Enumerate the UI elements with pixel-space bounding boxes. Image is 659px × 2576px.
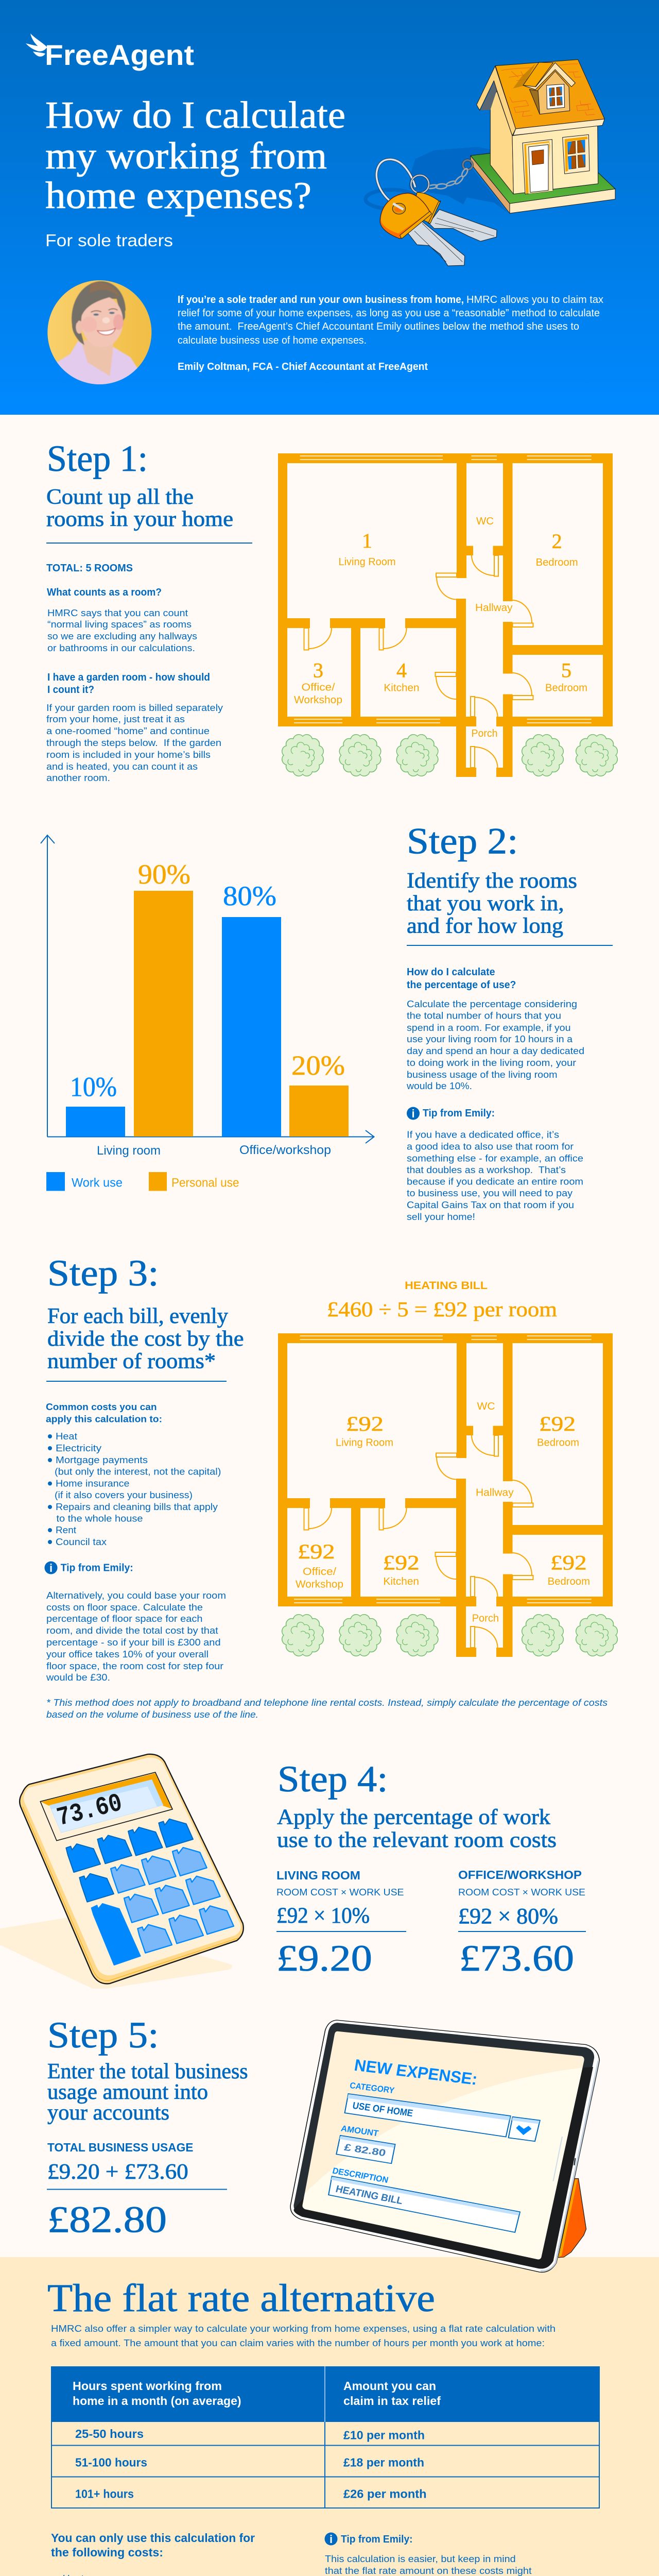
- intro text: HMRC also offer a simpler way to calculate your working from home expenses, using a flat rate calculation with: [51, 2323, 556, 2334]
- tip text: that the flat rate amount on these costs might: [325, 2565, 532, 2576]
- intro text: [178, 294, 603, 372]
- tip text: to business use, you will need to pay: [407, 1188, 573, 1198]
- total business usage: £9.20 + £73.60: [47, 2160, 188, 2184]
- intro text: a fixed amount. The amount that you can claim varies with the number of hours per month you work at home:: [51, 2337, 545, 2348]
- garden room answer: If your garden room is billed separately: [46, 702, 223, 713]
- subtitle: For sole traders: [45, 231, 173, 250]
- calculation: living room: LIVING ROOM: [276, 1869, 360, 1882]
- panel: flat rate alternative: [0, 2277, 659, 2576]
- total rooms: TOTAL: 5 ROOMS: [46, 563, 133, 574]
- icon: tip info: i: [330, 2533, 333, 2546]
- room cost labels: £92: [550, 1551, 587, 1574]
- tip text: Alternatively, you could base your room: [46, 1590, 226, 1601]
- eligible costs heading: [51, 2531, 255, 2559]
- subheading: divide the cost: [47, 1304, 244, 1374]
- room cost labels: Porch: [472, 1613, 499, 1624]
- room cost labels: £92: [346, 1412, 384, 1435]
- heating bill calculation: HEATING BILL: [405, 1280, 488, 1292]
- legend: [46, 1172, 239, 1191]
- footnote: based on the volume of business use of the line.: [46, 1709, 258, 1720]
- room labels: Porch: [472, 728, 497, 739]
- illustration: calculator: [0, 1754, 244, 1989]
- icon: tip info: [44, 1561, 58, 1574]
- garden room answer: another room.: [46, 772, 110, 783]
- calculator display value: 73.60: [54, 1789, 125, 1833]
- bar values: 80%: [223, 880, 276, 911]
- list of common costs: (but only the interest, not the capital): [55, 1466, 221, 1477]
- eligible costs heading: the following costs:: [51, 2546, 163, 2559]
- tip text: floor space, the room cost for step four: [46, 1660, 223, 1671]
- subheading: identify the rooms: [407, 869, 577, 938]
- room cost labels: Living Room: [336, 1437, 393, 1449]
- subheading: divide the cost: divide the cost by the: [47, 1327, 244, 1351]
- answer text: [47, 607, 197, 653]
- room cost labels: £92: [383, 1551, 420, 1574]
- room labels: 2: [552, 530, 562, 553]
- table header: home in a month (on average): [73, 2394, 241, 2408]
- tip text: your office takes 10% of your overall: [46, 1649, 209, 1659]
- table rows: [75, 2427, 427, 2501]
- tip text: If you have a dedicated office, it’s: [407, 1129, 559, 1140]
- subheading: identify the rooms: and for how long: [407, 914, 563, 938]
- footnote: * This method does not apply to broadband and telephone line rental costs. Instead, simply calculate the percentage of costs: [46, 1697, 608, 1708]
- tip text: [46, 1590, 226, 1683]
- bar values: 10%: [70, 1072, 117, 1103]
- list of common costs: Council tax: [56, 1536, 107, 1547]
- calculation: living room: ROOM COST × WORK USE: [276, 1887, 404, 1897]
- axis labels: [97, 1143, 331, 1158]
- tip text: a good idea to also use that room for: [407, 1141, 574, 1152]
- room labels: Hallway: [475, 602, 513, 614]
- subheading: enter the total: [47, 2060, 248, 2125]
- list of common costs: to the whole house: [57, 1513, 143, 1524]
- tip text: percentage - so if your bill is £300 and: [46, 1637, 221, 1648]
- form labels: NEW EXPENSE:: [353, 2056, 479, 2089]
- logo: FreeAgent: FreeAgent: [45, 39, 194, 71]
- tip text: room, and divide the total cost by that: [46, 1625, 218, 1636]
- question: what counts as a room: What counts as a room?: [47, 587, 162, 598]
- description field: [328, 2176, 520, 2232]
- table rows: 25-50 hours: [75, 2427, 144, 2441]
- panel: flat rate background: [0, 2257, 659, 2576]
- bar chart: work use vs personal use: [41, 835, 374, 1191]
- room labels: [294, 516, 587, 739]
- table rows: £10 per month: [343, 2429, 425, 2442]
- room cost labels: Office/: [303, 1566, 336, 1578]
- form labels: AMOUNT: [340, 2124, 379, 2138]
- amount field: [336, 2136, 395, 2163]
- subheading: apply the percentage: Apply the percentage of work: [277, 1806, 550, 1829]
- icon: tip info: [324, 2533, 338, 2546]
- title: How do I calculate: [45, 94, 345, 137]
- room labels: 5: [561, 658, 571, 682]
- question: percentage of use: [407, 967, 516, 991]
- photo: Emily Coltman: [47, 280, 151, 386]
- percentage explanation: to doing work in the living room, your: [407, 1057, 576, 1068]
- room cost labels: Bedroom: [548, 1576, 590, 1587]
- form labels: DESCRIPTION: [332, 2166, 389, 2185]
- form labels: HEATING BILL: [335, 2183, 404, 2207]
- question: garden room: [47, 672, 210, 696]
- tip heading: Tip from Emily:: [423, 1108, 495, 1119]
- tip text: because if you dedicate an entire room: [407, 1176, 583, 1187]
- subheading: Count up all the rooms: [46, 485, 233, 531]
- illustration: house with keys: [366, 60, 615, 266]
- list of common costs: Repairs and cleaning bills that apply: [56, 1501, 218, 1512]
- garden room answer: and is heated, you can count it as: [46, 761, 198, 772]
- table header: claim in tax relief: [343, 2394, 441, 2408]
- heading: Step 2: Step 2:: [407, 820, 518, 861]
- calculator keys: [66, 1819, 193, 1965]
- question: percentage of use: the percentage of use?: [407, 979, 516, 991]
- room labels: 4: [396, 658, 407, 682]
- heading: Step 4: Step 4:: [278, 1758, 388, 1800]
- subheading: divide the cost: For each bill, evenly: [47, 1304, 228, 1328]
- garden room answer: room is included in your home’s bills: [46, 749, 211, 760]
- legend: Personal use: [171, 1176, 239, 1190]
- percentage explanation: would be 10%.: [406, 1080, 472, 1091]
- percentage explanation: the total number of hours that you: [407, 1010, 561, 1021]
- floor plan: cost per room: [278, 1333, 617, 1657]
- total business usage: TOTAL BUSINESS USAGE: [47, 2141, 194, 2154]
- panel: step 4: [276, 1758, 586, 1979]
- eligible costs heading: You can only use this calculation for: [51, 2531, 255, 2545]
- subheading: Count up all the rooms: rooms in your home: [46, 507, 233, 531]
- heating bill calculation: £460 ÷ 5 = £92 per room: [327, 1297, 557, 1321]
- common costs heading: apply this calculation to:: [46, 1414, 162, 1424]
- percentage explanation: spend in a room. For example, if you: [407, 1022, 570, 1033]
- garden room answer: from your home, just treat it as: [46, 714, 185, 724]
- total business usage: £82.80: [47, 2199, 167, 2240]
- room labels: Kitchen: [384, 682, 419, 693]
- panel: step 1 text: [46, 438, 252, 783]
- tip text: would be £30.: [46, 1672, 110, 1683]
- legend: Work use: [72, 1176, 123, 1190]
- form labels: [332, 2056, 479, 2207]
- bar values: 90%: [138, 859, 190, 890]
- table header: [73, 2379, 441, 2408]
- icon: tip info: i: [49, 1562, 53, 1574]
- category field: [345, 2094, 511, 2137]
- common costs heading: Common costs you can: [46, 1401, 157, 1412]
- subheading: divide the cost: number of rooms*: [47, 1350, 216, 1374]
- panel: step 3 text: [44, 1252, 244, 1683]
- heading: The flat rate alternative: [47, 2277, 435, 2320]
- room cost labels: £92: [298, 1540, 335, 1563]
- percentage explanation: day and spend an hour a day dedicated: [407, 1045, 584, 1056]
- bars: living room: [66, 891, 193, 1137]
- answer text: so we are excluding any hallways: [47, 631, 197, 641]
- dropdown button: [509, 2117, 540, 2141]
- table rows: 101+ hours: [75, 2487, 134, 2501]
- room labels: Bedroom: [536, 557, 578, 568]
- intro text: calculate business use of home expenses.: [178, 335, 367, 346]
- tip text: Capital Gains Tax on that room if you: [407, 1199, 574, 1210]
- list of common costs: Home insurance: [56, 1478, 129, 1489]
- tip text: [407, 1129, 583, 1222]
- calculation: office workshop: ROOM COST × WORK USE: [458, 1887, 585, 1897]
- tip text: costs on floor space. Calculate the: [46, 1602, 203, 1613]
- axis labels: Living room: [97, 1144, 161, 1158]
- table rows: 51-100 hours: [75, 2456, 147, 2469]
- heading: Step 1: Step 1:: [47, 438, 148, 479]
- tip text: that doubles as a workshop. That’s: [407, 1164, 566, 1175]
- subheading: identify the rooms: that you work in,: [407, 892, 564, 916]
- intro text: relief for some of your home expenses, as long as you use a “reasonable” method to calculate: [178, 308, 600, 319]
- question: garden room: I have a garden room - how should: [47, 672, 210, 683]
- list of common costs: (if it also covers your business): [55, 1489, 193, 1500]
- calculation: living room: £9.20: [276, 1938, 372, 1979]
- subheading: apply the percentage: use to the relevant room costs: [277, 1828, 557, 1852]
- calculation: living room: [276, 1869, 406, 1979]
- subheading: identify the rooms: Identify the rooms: [407, 869, 577, 893]
- tip text: percentage of floor space for each: [46, 1613, 203, 1624]
- subheading: enter the total: usage amount into: [47, 2080, 208, 2104]
- heading: Step 3: Step 3:: [47, 1252, 159, 1294]
- panel: step 2 text: [406, 820, 613, 1222]
- answer text: or bathrooms in our calculations.: [47, 642, 195, 653]
- floor plan: room count: [278, 453, 617, 777]
- list of common costs: Heat: [56, 1431, 77, 1442]
- table: flat rate amounts: [51, 2366, 599, 2508]
- calculation: office workshop: [458, 1868, 586, 1979]
- list of common costs: Electricity: [56, 1443, 102, 1453]
- table header: Hours spent working from: [73, 2379, 222, 2393]
- form labels: £ 82.80: [343, 2142, 387, 2159]
- table header: Amount you can: [343, 2379, 436, 2393]
- bar values: 20%: [291, 1050, 345, 1081]
- tip heading: Tip from Emily:: [61, 1562, 133, 1573]
- bars: office: [222, 917, 349, 1137]
- list of common costs: [48, 1431, 221, 1547]
- intro text: If you’re a sole trader and run your own business from home,: [178, 294, 464, 306]
- heating bill calculation: [327, 1280, 557, 1321]
- tip text: This calculation is easier, but keep in mind: [325, 2553, 516, 2564]
- icon: tip info: [407, 1107, 420, 1120]
- percentage explanation: [406, 998, 584, 1091]
- illustration: tablet with expense form: [290, 2020, 599, 2272]
- list of common costs: Rent: [56, 1524, 76, 1535]
- table rows: £18 per month: [343, 2456, 424, 2469]
- calculation: office workshop: £92 × 80%: [458, 1904, 558, 1929]
- room cost labels: Bedroom: [537, 1437, 579, 1449]
- intro text: HMRC allows you to claim tax: [466, 294, 603, 306]
- garden room answer: [46, 702, 223, 783]
- title: my working from: [45, 135, 327, 177]
- subheading: apply the percentage: [277, 1806, 557, 1852]
- room cost labels: Kitchen: [383, 1576, 419, 1587]
- room labels: Workshop: [294, 694, 342, 706]
- percentage explanation: use your living room for 10 hours in a: [407, 1033, 573, 1044]
- room labels: Office/: [302, 682, 335, 693]
- title: [45, 94, 345, 217]
- form labels: CATEGORY: [349, 2080, 395, 2095]
- table rows: £26 per month: [343, 2487, 427, 2501]
- heading: Step 5: Step 5:: [47, 2014, 159, 2056]
- percentage explanation: Calculate the percentage considering: [407, 998, 577, 1009]
- percentage explanation: business usage of the living room: [407, 1069, 557, 1080]
- room cost labels: Hallway: [476, 1487, 514, 1499]
- tip text: sell your home!: [407, 1211, 475, 1222]
- calculation: office workshop: OFFICE/WORKSHOP: [458, 1868, 582, 1882]
- room cost labels: [296, 1401, 590, 1624]
- garden room answer: a one-roomed “home” and continue: [46, 725, 210, 736]
- title: home expenses?: [45, 175, 311, 217]
- common costs heading: [46, 1401, 162, 1424]
- room labels: Living Room: [339, 556, 395, 568]
- bar values: [70, 859, 345, 1103]
- answer text: HMRC says that you can count: [47, 607, 188, 618]
- subheading: enter the total: your accounts: [47, 2101, 169, 2125]
- list of common costs: Mortgage payments: [56, 1454, 148, 1465]
- room cost labels: Workshop: [296, 1579, 343, 1590]
- panel: header: [0, 0, 659, 415]
- room labels: 1: [362, 529, 372, 552]
- intro text: the amount. FreeAgent’s Chief Accountant Emily outlines below the method she uses to: [178, 321, 579, 332]
- room cost labels: WC: [477, 1401, 495, 1412]
- tip heading: Tip from Emily:: [341, 2534, 413, 2545]
- form labels: USE OF HOME: [352, 2100, 414, 2119]
- calculation: living room: £92 × 10%: [276, 1904, 370, 1928]
- calculation: office workshop: £73.60: [459, 1938, 574, 1979]
- subheading: Count up all the rooms: Count up all the: [46, 485, 194, 509]
- tip text: [325, 2553, 532, 2576]
- total business usage: [47, 2141, 227, 2240]
- footnote: [46, 1697, 608, 1720]
- question: garden room: I count it?: [47, 684, 94, 696]
- room labels: WC: [476, 516, 494, 527]
- room labels: 3: [313, 658, 323, 682]
- intro text: Emily Coltman, FCA - Chief Accountant at FreeAgent: [178, 361, 428, 372]
- axis labels: Office/workshop: [239, 1143, 331, 1157]
- question: percentage of use: How do I calculate: [407, 967, 495, 978]
- icon: tip info: i: [411, 1107, 415, 1120]
- answer text: “normal living spaces” as rooms: [47, 619, 192, 630]
- garden room answer: through the steps below. If the garden: [46, 737, 221, 748]
- room labels: Bedroom: [545, 682, 587, 693]
- intro text: [51, 2323, 556, 2348]
- panel: step 5: [47, 2014, 248, 2240]
- subheading: enter the total: Enter the total business: [47, 2060, 248, 2083]
- room cost labels: £92: [539, 1412, 576, 1435]
- tip text: something else - for example, an office: [407, 1153, 583, 1163]
